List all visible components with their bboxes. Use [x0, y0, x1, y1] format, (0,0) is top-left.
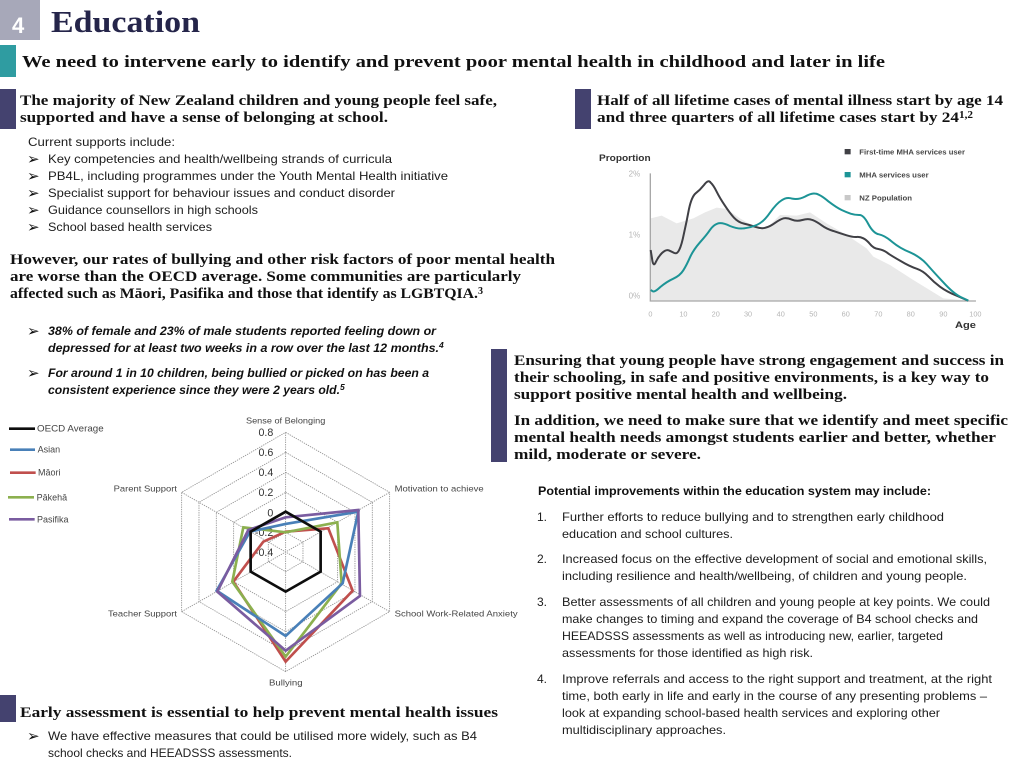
radar category labels: Teacher Support	[108, 609, 178, 619]
radar legend: Asian	[38, 445, 60, 455]
subtitle heading with teal marker: We need to intervene early to identify and prevent poor mental health in childhood and later in life	[22, 52, 886, 71]
statistics bullets: 38% of female and 23% of male students reported feeling down or	[48, 324, 437, 338]
axis labels: 80	[907, 310, 915, 319]
potential improvements list: HEEADSSS assessments as well as introducing new, earlier, targeted	[562, 629, 943, 643]
current supports list: ➢	[27, 167, 40, 185]
text block: bullying and risk factors: However, our rates of bullying and other risk factors of poor mental health	[10, 252, 555, 268]
radar legend: Pasifika	[37, 514, 68, 524]
potential improvements list: look at expanding school-based health services and exploring other	[562, 706, 940, 720]
text block: bullying and risk factors: 3	[478, 286, 483, 297]
potential improvements list: make changes to timing and expand the coverage of B4 school checks and	[562, 612, 978, 626]
radar category labels: School Work-Related Anxiety	[395, 609, 518, 619]
axis labels	[599, 153, 982, 330]
statistics bullets: 4	[438, 340, 444, 350]
axis labels: 100	[969, 310, 982, 319]
text block: engagement and specific needs: mental health needs amongst students earlier and better, whether	[514, 430, 997, 446]
text block: engagement and specific needs	[491, 349, 1009, 463]
potential improvements list: Potential improvements within the education system may include:	[538, 484, 931, 498]
legend: First-time MHA services user	[859, 149, 965, 156]
radar legend: OECD Average	[37, 424, 104, 434]
heading: feel safe at school	[0, 89, 497, 129]
early assessment bullet: ➢	[27, 727, 40, 745]
series: Pasifika	[217, 510, 360, 651]
title: Education	[51, 4, 200, 39]
series: Māori	[233, 528, 353, 662]
potential improvements list: education and school cultures.	[562, 527, 733, 541]
current supports list: ➢	[27, 150, 40, 168]
current supports list: ➢	[27, 218, 40, 236]
axis labels: 30	[744, 310, 752, 319]
subtitle heading with teal marker	[0, 45, 886, 77]
current supports list: Key competencies and health/wellbeing strands of curricula	[48, 152, 392, 166]
area: NZ population	[651, 208, 968, 301]
radar grid	[182, 432, 390, 672]
axis labels: 90	[939, 310, 947, 319]
radar chart	[8, 415, 518, 687]
heading: onset of mental illness: 1,2	[959, 110, 973, 121]
axis labels: 0	[648, 310, 652, 319]
legend	[845, 149, 965, 202]
text block: bullying and risk factors	[10, 252, 555, 302]
axis labels: 20	[712, 310, 720, 319]
radar category labels	[108, 415, 518, 687]
current supports list	[27, 135, 448, 236]
statistics bullets: ➢	[27, 364, 40, 382]
line: MHA services user	[651, 193, 968, 301]
text block: bullying and risk factors: are worse than the OECD average. Some communities are particularly	[10, 269, 522, 285]
radar axis values: 0.2	[258, 487, 273, 499]
radar category labels: Motivation to achieve	[395, 484, 484, 494]
heading: early assessment	[0, 695, 498, 722]
series: Pākehā	[232, 522, 342, 657]
early assessment bullet: school checks and HEEADSSS assessments.	[48, 746, 292, 760]
axis labels: 2%	[629, 169, 640, 178]
radar category labels: Bullying	[269, 677, 303, 687]
axis labels: 50	[809, 310, 817, 319]
early assessment bullet	[27, 727, 477, 760]
current supports list: ➢	[27, 201, 40, 219]
radar legend: Māori	[38, 468, 60, 478]
potential improvements list: 4.	[537, 672, 547, 686]
radar legend: Pākehā	[37, 492, 67, 502]
potential improvements list: 1.	[537, 510, 547, 524]
potential improvements list: Improve referrals and access to the right support and treatment, at the right	[562, 672, 993, 686]
potential improvements list: 2.	[537, 552, 547, 566]
radar category labels: Parent Support	[114, 484, 178, 494]
statistics bullets	[27, 322, 444, 397]
statistics bullets: depressed for at least two weeks in a row over the last 12 months.	[48, 341, 439, 355]
current supports list: School based health services	[48, 220, 212, 234]
potential improvements list: assessments for those identified as high risk.	[562, 646, 813, 660]
axis labels: 60	[842, 310, 850, 319]
section number badge	[0, 0, 40, 40]
radar axis values	[255, 427, 273, 559]
statistics bullets: consistent experience since they were 2 years old.	[48, 383, 340, 397]
radar legend	[8, 424, 104, 524]
statistics bullets: ➢	[27, 322, 40, 340]
line: first-time MHA services user	[651, 181, 968, 301]
legend: NZ Population	[859, 195, 912, 202]
radar axis values: 0.8	[258, 427, 273, 439]
text block: engagement and specific needs: Ensuring that young people have strong engagement and success in	[514, 353, 1004, 369]
radar axis values: -0.4	[255, 547, 273, 559]
text block: engagement and specific needs: their schooling, in safe and positive environments, is a key way to	[514, 370, 989, 386]
series: Asian	[217, 512, 358, 636]
axis labels: 1%	[629, 231, 640, 240]
current supports list: Specialist support for behaviour issues and conduct disorder	[48, 186, 395, 200]
potential improvements list: 3.	[537, 595, 547, 609]
heading: onset of mental illness: and three quarters of all lifetime cases start by 24	[597, 110, 960, 126]
potential improvements list: multidisciplinary approaches.	[562, 723, 726, 737]
axes	[650, 173, 976, 301]
potential improvements list: including resilience and health/wellbeing, of children and young people.	[562, 569, 967, 583]
text block: bullying and risk factors: affected such as Māori, Pasifika and those that identify as LGBTQIA.	[10, 286, 478, 302]
radar category labels: Sense of Belonging	[246, 415, 326, 425]
current supports list: Current supports include:	[28, 135, 175, 149]
potential improvements list	[537, 484, 993, 737]
heading: onset of mental illness: Half of all lifetime cases of mental illness start by age 14	[597, 93, 1004, 109]
text block: engagement and specific needs: mild, moderate or severe.	[514, 447, 701, 463]
current supports list: Guidance counsellors in high schools	[48, 203, 258, 217]
potential improvements list: Better assessments of all children and young people at key points. We could	[562, 595, 990, 609]
radar axis values: 0	[267, 507, 273, 519]
text block: engagement and specific needs: support positive mental health and wellbeing.	[514, 387, 847, 403]
heading: onset of mental illness	[575, 89, 1004, 129]
radar axis values: -0.2	[255, 527, 273, 539]
potential improvements list: Increased focus on the effective development of social and emotional skills,	[562, 552, 987, 566]
series: OECD average	[251, 512, 321, 592]
heading: feel safe at school: The majority of New Zealand children and young people feel safe,	[20, 93, 497, 109]
statistics bullets: For around 1 in 10 children, being bullied or picked on has been a	[48, 366, 429, 380]
early assessment bullet: We have effective measures that could be utilised more widely, such as B4	[48, 729, 477, 743]
current supports list: PB4L, including programmes under the Youth Mental Health initiative	[48, 169, 448, 183]
axis labels: 70	[874, 310, 882, 319]
statistics bullets: 5	[340, 382, 345, 392]
line chart: proportion by age	[599, 149, 982, 330]
axis labels: 40	[777, 310, 785, 319]
potential improvements list: Further efforts to reduce bullying and to strengthen early childhood	[562, 510, 944, 524]
axis labels: Proportion	[599, 153, 651, 163]
heading: feel safe at school: supported and have a sense of belonging at school.	[20, 110, 388, 126]
potential improvements list: time, both early in life and early in the course of any presenting problems –	[562, 689, 987, 703]
radar axis values: 0.6	[258, 447, 273, 459]
heading: early assessment: Early assessment is essential to help prevent mental health issues	[20, 705, 498, 721]
legend: MHA services user	[859, 172, 929, 179]
axis labels: 10	[679, 310, 687, 319]
axis labels: 0%	[629, 292, 640, 301]
text block: engagement and specific needs: In addition, we need to make sure that we identify and meet specific	[514, 413, 1009, 429]
current supports list: ➢	[27, 184, 40, 202]
radar axis values: 0.4	[258, 467, 273, 479]
section number badge: 4	[12, 13, 25, 38]
axis labels: Age	[955, 320, 976, 330]
